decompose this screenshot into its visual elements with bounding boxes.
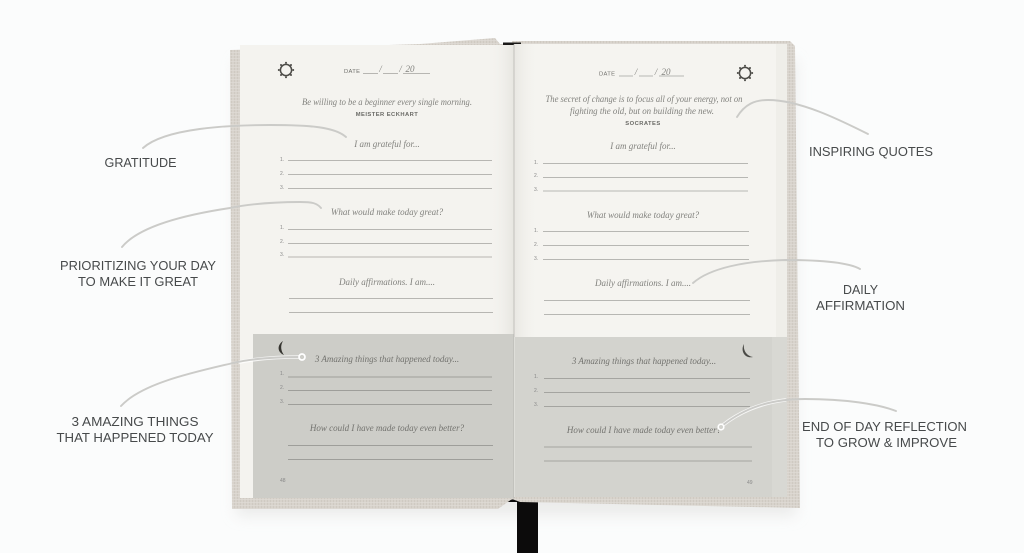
better prompt right <box>544 425 752 461</box>
label: inspiring quotes: INSPIRING QUOTES <box>809 144 933 159</box>
date line left <box>344 64 430 75</box>
great day prompt right: 3. <box>534 256 538 262</box>
spine top band <box>503 42 521 45</box>
great day prompt left: What would make today great? <box>331 207 444 217</box>
icon: sun right <box>737 65 753 81</box>
callout line: inspiring quotes <box>737 100 868 134</box>
gratitude prompt right: I am grateful for... <box>609 141 676 151</box>
page number 48: 48 <box>280 478 286 484</box>
label: daily affirmation <box>816 282 905 313</box>
label: daily affirmation: DAILY <box>843 282 878 297</box>
label: prioritizing: TO MAKE IT GREAT <box>78 274 198 289</box>
quote right <box>546 94 743 116</box>
quote right: fighting the old, but on building the new. <box>570 106 714 116</box>
callout line: prioritizing <box>122 202 321 247</box>
date line left: / <box>398 64 403 74</box>
linen cover <box>230 38 800 509</box>
gratitude prompt left: 1. <box>280 157 284 163</box>
callout: daily affirmation <box>693 260 905 313</box>
label: amazing things: 3 AMAZING THINGS <box>72 414 199 429</box>
great day prompt right: 1. <box>534 228 538 234</box>
label: prioritizing <box>60 258 216 289</box>
amazing things prompt right: 3. <box>534 402 538 408</box>
great day prompt left: 2. <box>280 239 284 245</box>
callout line: gratitude <box>143 125 346 148</box>
gratitude prompt right: 2. <box>534 173 538 179</box>
gratitude prompt left: I am grateful for... <box>353 139 420 149</box>
amazing things prompt left: 3. <box>280 399 284 405</box>
gratitude prompt right <box>534 141 748 193</box>
date line right: DATE <box>599 72 615 78</box>
amazing things prompt left <box>280 354 492 405</box>
callout: prioritizing <box>60 202 321 289</box>
callout line: end of day reflection <box>718 399 896 430</box>
gratitude prompt left: 2. <box>280 171 284 177</box>
date line left: / <box>378 64 383 74</box>
left evening panel <box>253 334 514 498</box>
right evening panel <box>515 337 787 497</box>
quote right: The secret of change is to focus all of your energy, not on <box>546 94 743 104</box>
right page <box>514 44 787 497</box>
great day prompt right: 2. <box>534 242 538 248</box>
date line left: 20 <box>406 64 415 74</box>
callout: gratitude <box>104 125 346 170</box>
ribbon bookmark <box>503 498 538 553</box>
amazing things prompt right: 3 Amazing things that happened today... <box>571 356 716 366</box>
label: end of day reflection: END OF DAY REFLECTION <box>802 419 967 434</box>
label: end of day reflection: TO GROW & IMPROVE <box>816 435 957 450</box>
label: amazing things <box>56 414 214 445</box>
gratitude prompt right: 1. <box>534 160 538 166</box>
icon: sun left <box>278 62 294 78</box>
book shadow <box>236 60 796 516</box>
callout: amazing things <box>56 354 305 445</box>
amazing things prompt left: 3 Amazing things that happened today... <box>314 354 459 364</box>
great day prompt left <box>280 207 492 258</box>
amazing things prompt right: 1. <box>534 374 538 380</box>
great day prompt right: What would make today great? <box>587 210 700 220</box>
affirmation prompt left <box>289 277 493 312</box>
callout line: amazing things <box>121 354 305 406</box>
label: prioritizing: PRIORITIZING YOUR DAY <box>60 258 216 273</box>
amazing things prompt right <box>534 356 750 408</box>
date line left: DATE <box>344 69 360 75</box>
better prompt left <box>288 423 493 460</box>
page gutter line <box>514 44 515 498</box>
amazing things prompt left: 2. <box>280 385 284 391</box>
gratitude prompt right: 3. <box>534 187 538 193</box>
icon: moon left <box>279 341 284 355</box>
better prompt left: How could I have made today even better? <box>309 423 465 433</box>
date line right: / <box>654 67 659 77</box>
icon: moon right <box>743 344 753 357</box>
affirmation prompt right: Daily affirmations. I am.... <box>594 278 691 288</box>
label: gratitude: GRATITUDE <box>104 155 177 170</box>
callout: end of day reflection <box>718 399 967 450</box>
label: amazing things: THAT HAPPENED TODAY <box>56 430 214 445</box>
great day prompt left: 1. <box>280 225 284 231</box>
date line right <box>599 67 684 78</box>
quote left: Be willing to be a beginner every single morning. <box>302 97 472 107</box>
amazing things prompt left: 1. <box>280 371 284 377</box>
great day prompt left: 3. <box>280 252 284 258</box>
quote author right: SOCRATES <box>625 121 661 127</box>
quote author left: MEISTER ECKHART <box>356 112 418 118</box>
left page <box>240 45 514 498</box>
book <box>230 38 800 553</box>
callout: inspiring quotes <box>737 100 933 159</box>
page number 49: 49 <box>747 480 753 486</box>
great day prompt right <box>534 210 749 262</box>
right page content <box>534 65 753 486</box>
date line right: / <box>634 67 639 77</box>
better prompt right: How could I have made today even better? <box>566 425 722 435</box>
label: daily affirmation: AFFIRMATION <box>816 298 905 313</box>
label: end of day reflection <box>802 419 967 450</box>
amazing things prompt right: 2. <box>534 388 538 394</box>
affirmation prompt left: Daily affirmations. I am.... <box>338 277 435 287</box>
affirmation prompt right <box>544 278 750 314</box>
left page content <box>278 62 493 484</box>
gratitude prompt left: 3. <box>280 185 284 191</box>
callout line: daily affirmation <box>693 260 860 283</box>
date line right: 20 <box>662 67 671 77</box>
gratitude prompt left <box>280 139 492 191</box>
